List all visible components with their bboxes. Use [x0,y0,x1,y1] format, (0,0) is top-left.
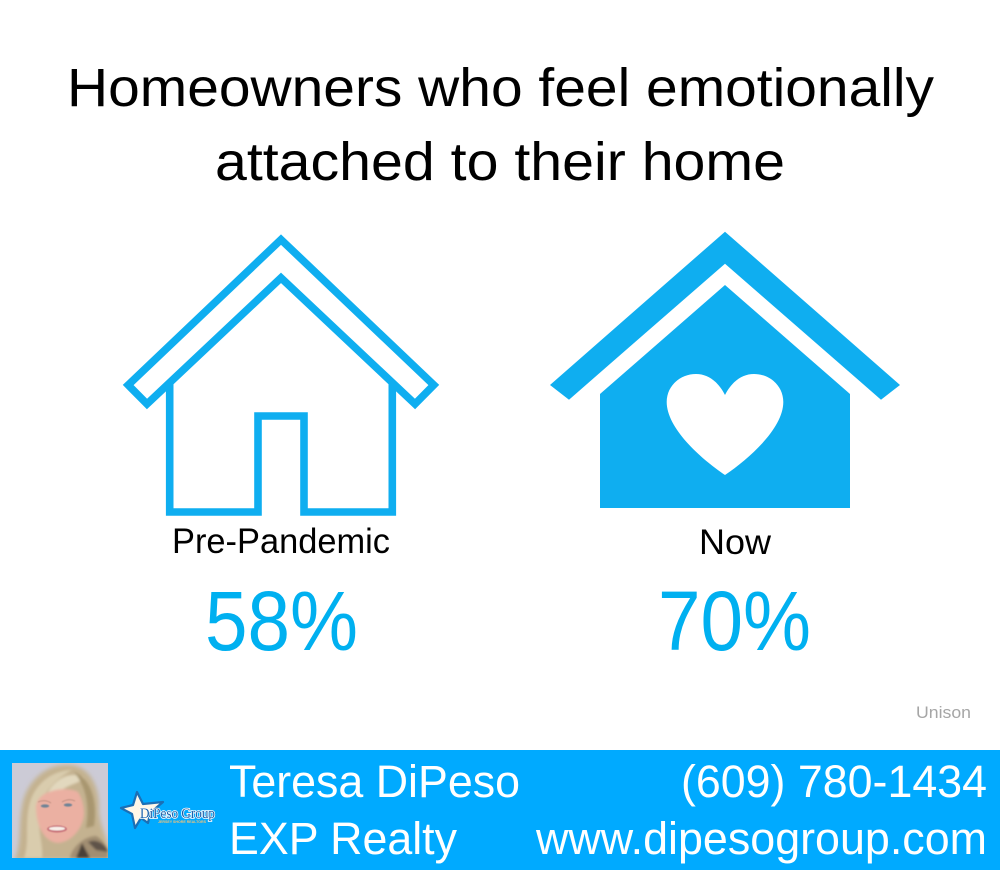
title: Homeowners who feel emotionally [67,58,934,118]
label: now: Now [699,523,772,562]
title: attached to their home [215,132,785,192]
label: pre-pandemic: Pre-Pandemic [172,522,390,561]
logo: DiPeso Group: DiPeso Group [140,806,215,822]
icon: outlined house (pre-pandemic) [128,240,434,512]
footer banner [0,750,1000,870]
agent photo [12,763,110,860]
agent name: Teresa DiPeso [229,756,520,807]
website: www.dipesogroup.com [535,813,987,864]
title [67,58,934,192]
logo: DiPeso Group: JERSEY SHORE REALTORS [158,820,207,824]
source: Unison: Unison [916,703,971,722]
phone number: (609) 780-1434 [681,756,987,807]
value: 58%: 58% [205,574,358,668]
value: 70%: 70% [658,574,811,668]
logo: DiPeso Group [121,792,215,828]
brokerage: EXP Realty [229,813,457,864]
icon: filled house with heart (now) [550,232,900,508]
